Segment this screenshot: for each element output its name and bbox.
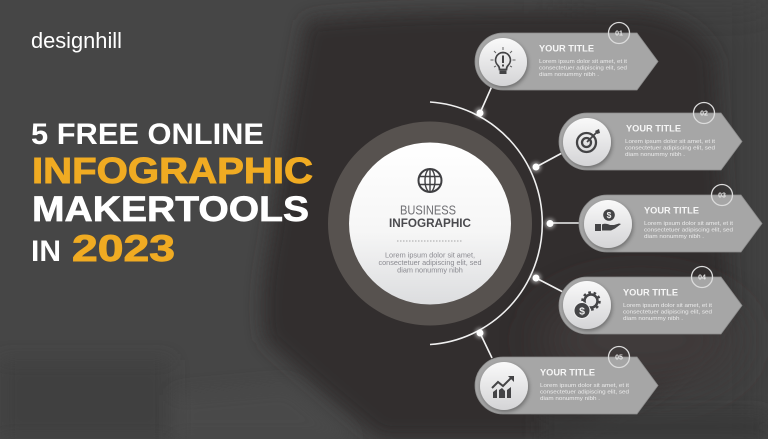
- card 05: Lorem ipsum dolor sit amet, et it: [540, 383, 629, 389]
- badge 03: [712, 184, 732, 206]
- card 03: consectetuer adipiscing elit, sed: [644, 228, 733, 234]
- card 05: diam nonummy nibh .: [540, 396, 600, 402]
- card 01: consectetuer adipiscing elit, sed: [539, 66, 627, 72]
- title: IN: [31, 235, 61, 268]
- card 03: Lorem ipsum dolor sit amet, et it: [644, 221, 733, 227]
- badge 05: 05: [615, 354, 623, 362]
- center body text: diam nonummy nibh: [397, 266, 463, 274]
- central circle: [349, 142, 511, 304]
- card 03: [579, 184, 762, 252]
- icon: target: [577, 129, 600, 152]
- center body text: consectetuer adipiscing elit, sed: [378, 258, 482, 267]
- card text: YOUR TITLE: [623, 288, 678, 298]
- card text: YOUR TITLE: [644, 206, 699, 216]
- dotted divider: [397, 240, 463, 242]
- card 02: consectetuer adipiscing elit, sed: [625, 146, 715, 152]
- title: MAKERTOOLS: [32, 189, 309, 229]
- card 04: diam nonummy nibh .: [623, 316, 683, 322]
- card 04: consectetuer adipiscing elit, sed: [623, 310, 712, 316]
- card text: YOUR TITLE: [540, 368, 595, 378]
- badge 03: 03: [718, 192, 726, 200]
- badge 02: [694, 102, 714, 124]
- card 01: [475, 22, 658, 90]
- badge 01: [608, 22, 630, 44]
- badge 05: [608, 346, 630, 368]
- central circle: INFOGRAPHIC: [389, 216, 471, 230]
- center body text: [378, 250, 482, 274]
- icon: gear and coin: $: [579, 306, 585, 318]
- outer ring: [328, 122, 532, 326]
- badge 04: 04: [698, 274, 706, 282]
- title: 2023: [72, 228, 175, 269]
- card text: YOUR TITLE: [626, 124, 681, 134]
- icon: light bulb: [490, 47, 516, 74]
- center body text: Lorem ipsum dolor sit amet,: [385, 250, 475, 260]
- card 01: Lorem ipsum dolor sit amet, et it: [539, 59, 627, 65]
- icon: gear and coin: [574, 292, 600, 318]
- connector arc: [430, 86, 582, 358]
- card 02: diam nonummy nibh .: [625, 152, 685, 158]
- card 03: diam nonummy nibh .: [644, 234, 704, 240]
- center heading: BUSINESS: [400, 202, 456, 218]
- card text: YOUR TITLE: [539, 44, 594, 54]
- card 02: [559, 102, 742, 170]
- card 02: Lorem ipsum dolor sit amet, et it: [625, 139, 715, 145]
- badge 04: [692, 266, 712, 288]
- card 05: consectetuer adipiscing elit, sed: [540, 390, 629, 396]
- card 01: diam nonummy nibh .: [539, 72, 599, 78]
- title: INFOGRAPHIC: [32, 150, 313, 191]
- badge 01: 01: [615, 30, 623, 38]
- connector nodes: [474, 108, 556, 338]
- card 04: Lorem ipsum dolor sit amet, et it: [623, 303, 712, 309]
- card 05: [475, 346, 658, 414]
- title: [31, 118, 313, 269]
- icon: hand with coin: [595, 209, 621, 231]
- card 04: [559, 266, 742, 334]
- icon: growth chart: [492, 376, 514, 398]
- icon: hand with coin: $: [607, 210, 612, 220]
- title: 5 FREE ONLINE: [31, 118, 264, 151]
- icon: globe: [418, 169, 442, 192]
- logo: designhill: designhill: [31, 28, 122, 53]
- badge 02: 02: [700, 110, 708, 118]
